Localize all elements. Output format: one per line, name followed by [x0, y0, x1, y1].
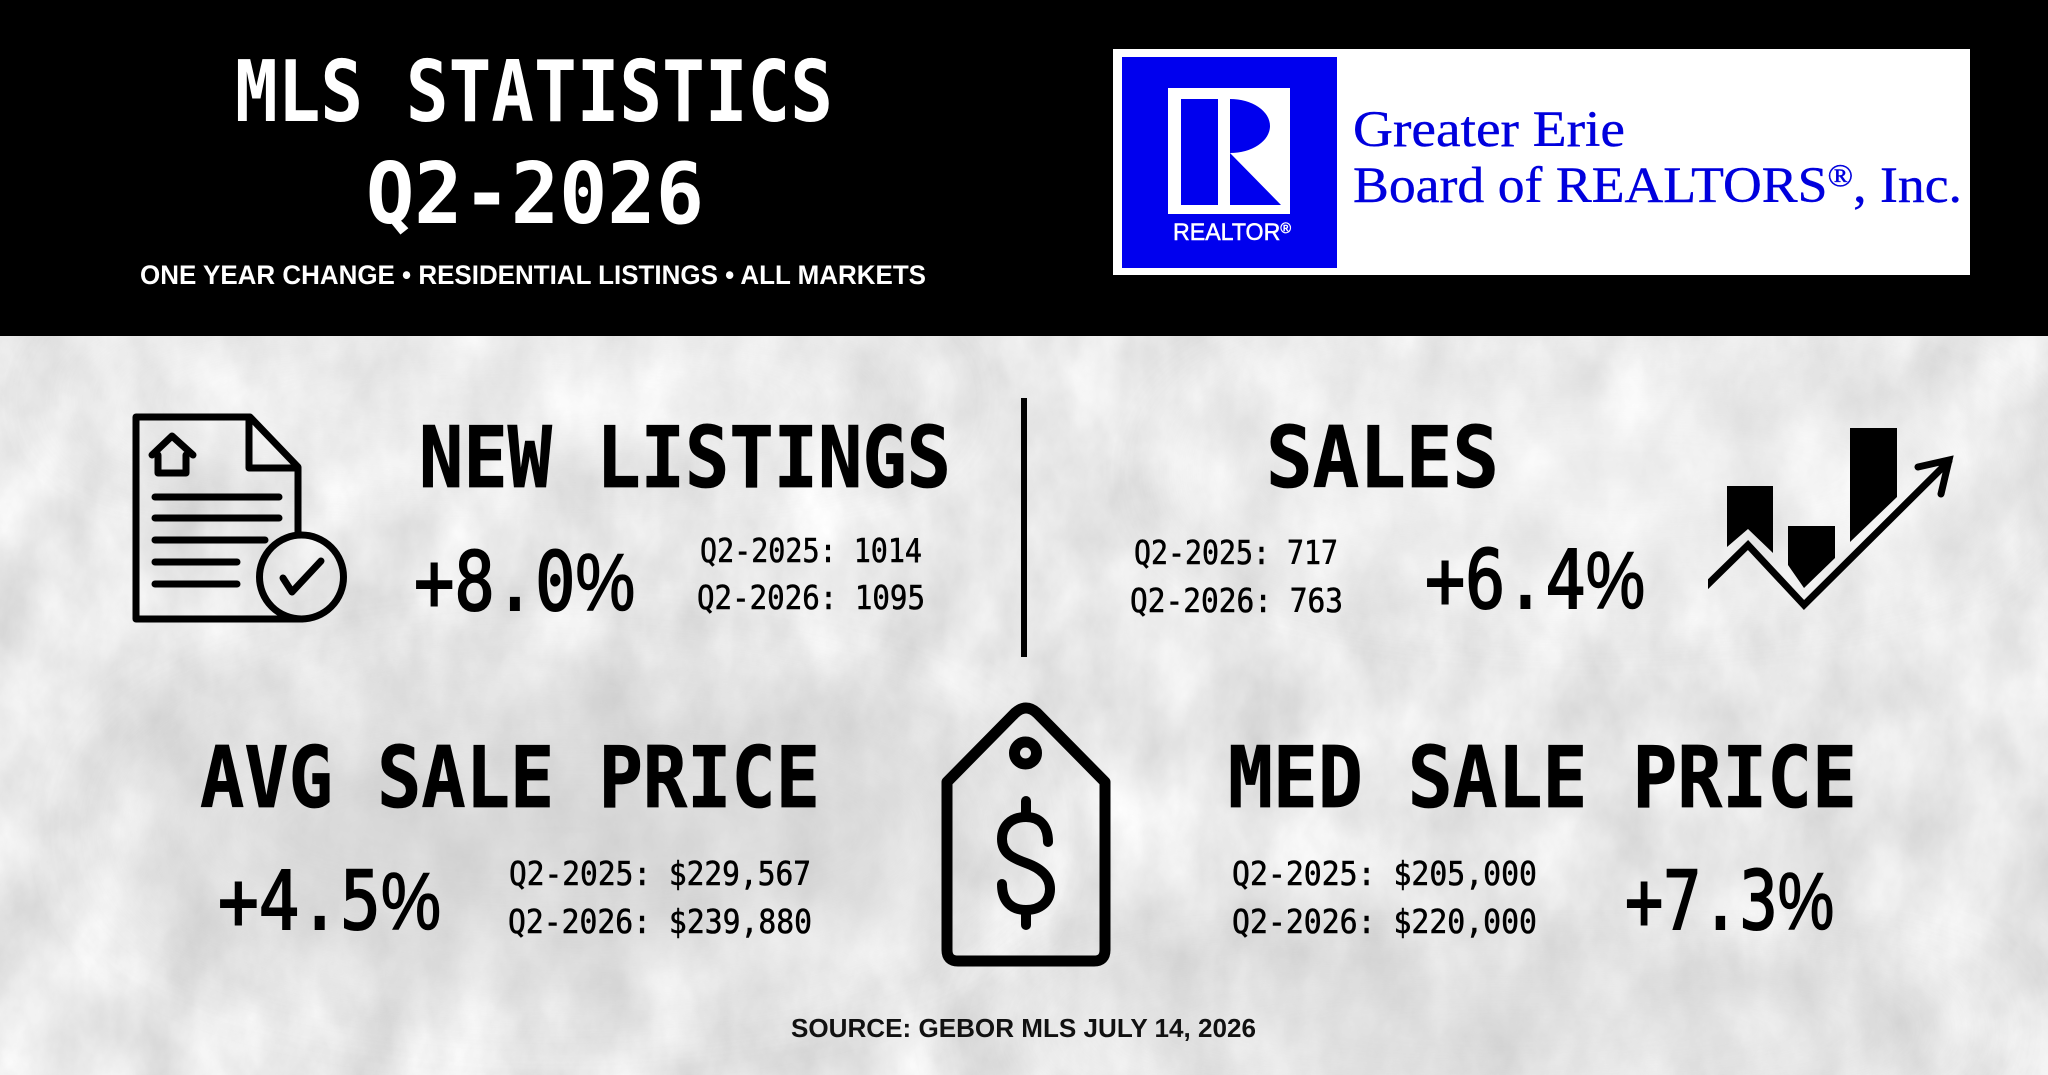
- icon: bar chart with rising arrow: [1700, 428, 1949, 605]
- panel: average sale price: [200, 729, 820, 949]
- icon: listing document with check: [136, 417, 344, 619]
- Q2-2026 value: Q2-2026: 1095: [697, 578, 925, 617]
- Q2-2025 value: Q2-2025: 1014: [700, 531, 922, 570]
- panel: median sale price: [1228, 729, 1857, 949]
- Q2-2026 value: Q2-2026: $239,880: [508, 902, 812, 941]
- Q2-2025 value: Q2-2025: 717: [1134, 533, 1338, 572]
- logo: Greater Erie Board of REALTORS: , Inc.: [1853, 158, 1962, 214]
- source note: SOURCE: GEBOR MLS JULY 14, 2026: [791, 1013, 1256, 1043]
- title: MLS Statistics: MLS STATISTICS: [235, 43, 833, 142]
- Q2-2025 value: Q2-2025: $229,567: [509, 854, 811, 893]
- panel: sales: [1131, 424, 1954, 617]
- heading: NEW LISTINGS: [419, 409, 951, 508]
- Q2-2025 value: Q2-2025: $205,000: [1232, 854, 1537, 893]
- logo: Greater Erie Board of REALTORS: ®: [1280, 220, 1291, 237]
- logo: Greater Erie Board of REALTORS: Greater Erie: [1353, 102, 1625, 158]
- panel: new listings: [136, 409, 951, 630]
- heading: MED SALE PRICE: [1228, 729, 1857, 828]
- header band: [0, 0, 2048, 336]
- percent change: +6.4%: [1425, 533, 1645, 628]
- logo: Greater Erie Board of REALTORS: ®: [1828, 157, 1853, 193]
- icon: price tag with dollar sign: [947, 708, 1105, 961]
- Q2-2026 value: Q2-2026: $220,000: [1232, 902, 1537, 941]
- logo: Greater Erie Board of REALTORS: [1113, 49, 1970, 275]
- heading: SALES: [1266, 409, 1499, 508]
- subtitle: ONE YEAR CHANGE • RESIDENTIAL LISTINGS • ALL MARKETS: [140, 260, 926, 290]
- percent change: +8.0%: [414, 535, 635, 630]
- logo: Greater Erie Board of REALTORS: REALTOR: [1173, 219, 1284, 246]
- logo: Greater Erie Board of REALTORS: Board of REALTORS: [1353, 158, 1804, 214]
- background: concrete texture: [0, 336, 2048, 1075]
- Q2-2026 value: Q2-2026: 763: [1130, 581, 1343, 620]
- percent change: +7.3%: [1625, 854, 1834, 949]
- title: quarter: Q2-2026: [366, 145, 704, 244]
- percent change: +4.5%: [218, 854, 441, 949]
- heading: AVG SALE PRICE: [200, 729, 820, 828]
